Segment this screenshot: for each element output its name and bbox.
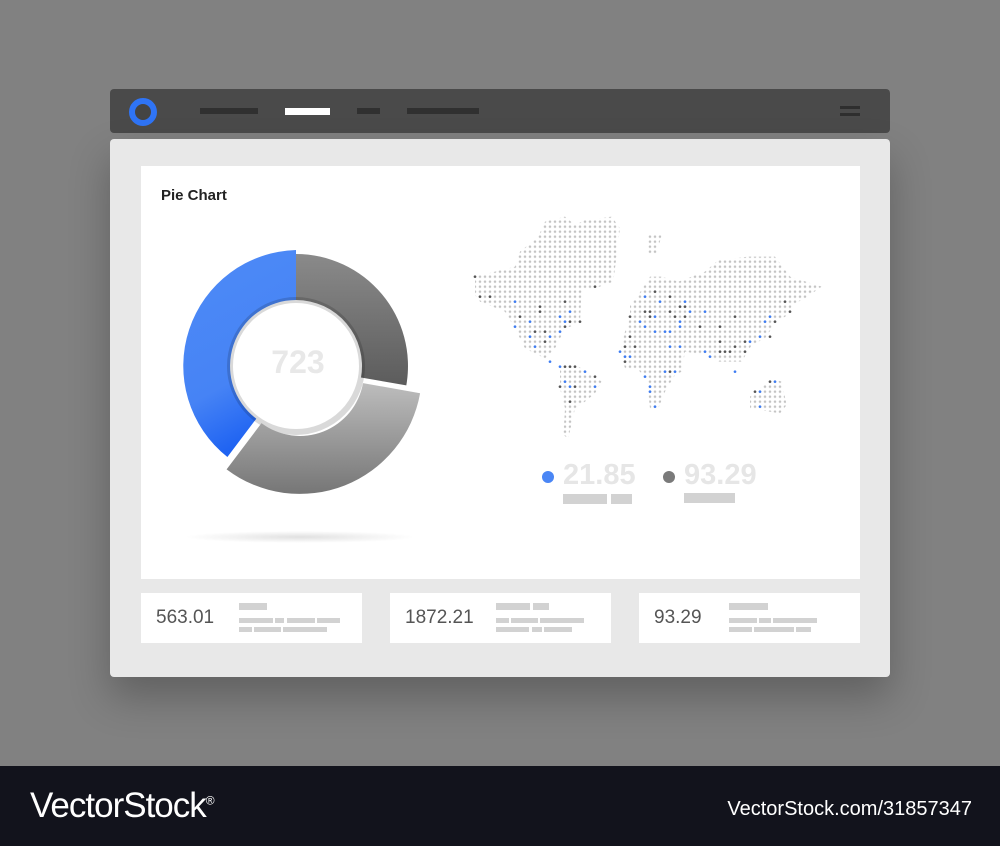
legend: blue value: 21.85 <box>563 459 636 491</box>
chart card <box>141 166 860 579</box>
text: 1872.21 <box>405 607 474 628</box>
icon: hamburger menu <box>840 106 860 116</box>
footer logo text: VectorStock® <box>30 786 214 825</box>
legend: gray value: 93.29 <box>684 459 757 491</box>
header bar <box>110 89 890 133</box>
legend: gray value <box>663 459 757 503</box>
stat card 1 <box>141 593 362 643</box>
footer url: VectorStock.com/31857347 <box>727 798 972 820</box>
icon: logo ring <box>129 98 157 126</box>
dotted world map <box>474 216 822 437</box>
legend: blue value <box>542 459 636 504</box>
text: 93.29 <box>654 607 702 628</box>
main panel <box>110 139 890 677</box>
stat card 2 <box>390 593 611 643</box>
footer banner <box>0 766 1000 846</box>
text: 563.01 <box>156 607 214 628</box>
nav items <box>200 108 479 115</box>
heading: Pie Chart: Pie Chart <box>161 187 227 204</box>
donut chart: 723 <box>271 344 325 380</box>
stat card 3 <box>639 593 860 643</box>
